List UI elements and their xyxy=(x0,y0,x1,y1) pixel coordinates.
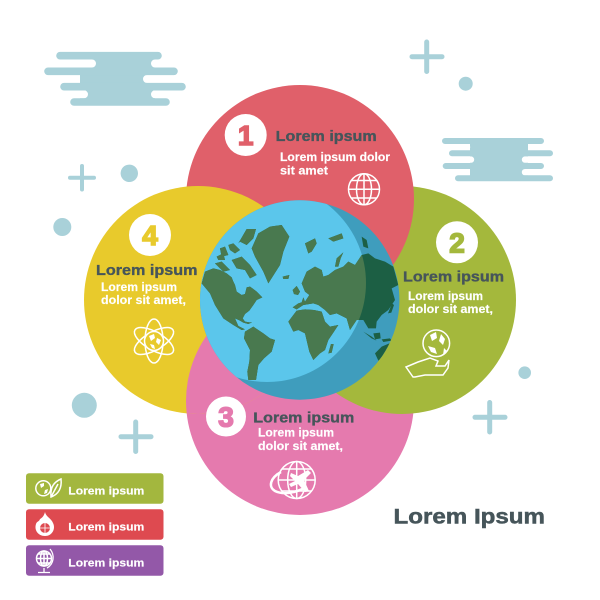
text 1: Lorem ipsum dolor xyxy=(280,152,391,164)
number badge 4 xyxy=(129,214,171,256)
icon: globe xyxy=(348,174,380,205)
pink overlap over yellow xyxy=(186,336,264,414)
legend bar: purple: Lorem ipsum xyxy=(68,558,145,570)
section 1 content xyxy=(225,114,391,205)
icon: flame with globe xyxy=(35,512,54,536)
panel: green circle xyxy=(288,186,516,414)
heading 2: Lorem ipsum xyxy=(403,269,504,286)
panel: red circle xyxy=(186,85,414,313)
icon: desk globe xyxy=(36,549,53,572)
title: bottom right: Lorem Ipsum xyxy=(394,505,545,528)
icon: globe and leaf xyxy=(36,479,61,497)
legend bar: purple xyxy=(26,545,164,576)
panel: yellow circle xyxy=(84,186,312,414)
icon: globe with plane xyxy=(271,462,315,498)
text 1: sit amet xyxy=(280,166,328,178)
text 3: dolor sit amet, xyxy=(258,441,343,453)
text 4: Lorem ipsum xyxy=(101,282,177,294)
legend bar: green: Lorem ipsum xyxy=(68,486,145,498)
section 3 content xyxy=(206,396,354,498)
text 4: dolor sit amet, xyxy=(101,295,186,307)
icon: hand holding globe xyxy=(406,330,450,377)
number badge 2: 2 xyxy=(449,228,465,258)
decorative plus signs and dots xyxy=(53,42,531,452)
cloud: top left xyxy=(40,56,190,102)
number badge 3 xyxy=(206,396,246,436)
heading 4: Lorem ipsum xyxy=(96,262,198,279)
number badge 4: 4 xyxy=(142,220,158,251)
number badge 2 xyxy=(436,221,478,263)
legend bar: green xyxy=(26,473,164,504)
legend bar: red xyxy=(26,509,164,540)
text 2: dolor sit amet, xyxy=(408,304,493,316)
text 2: Lorem ipsum xyxy=(408,291,483,303)
panel: pink circle xyxy=(186,287,414,515)
legend bar: red: Lorem ipsum xyxy=(68,522,145,534)
number badge 1: 1 xyxy=(238,120,253,151)
icon: atom globe xyxy=(130,319,178,363)
globe with world map xyxy=(200,200,400,400)
heading 3: Lorem ipsum xyxy=(253,409,354,426)
heading 1: Lorem ipsum xyxy=(276,128,377,145)
text 3: Lorem ipsum xyxy=(258,428,334,440)
number badge 3: 3 xyxy=(218,402,234,432)
section 4 content xyxy=(96,214,198,363)
number badge 1 xyxy=(225,114,267,156)
cloud: top right xyxy=(436,141,556,178)
section 2 content xyxy=(403,221,504,377)
